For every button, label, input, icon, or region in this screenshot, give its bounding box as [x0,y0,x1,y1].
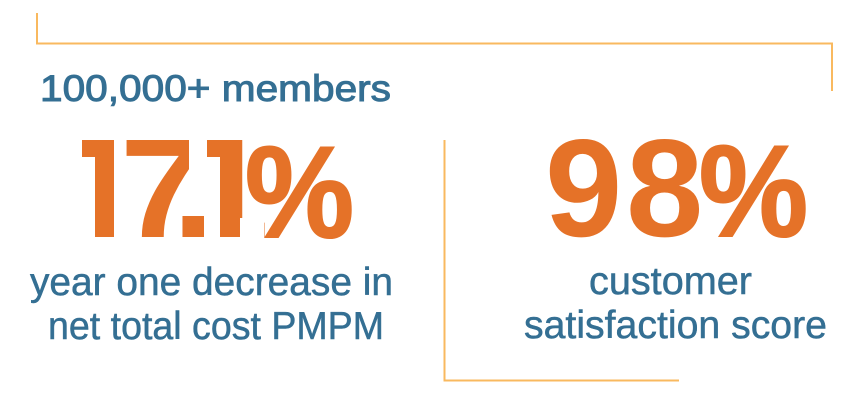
label line two: net total cost PMPM [48,305,384,348]
stat: 98%: % [699,118,808,264]
stat: 98%: 8 [626,111,703,266]
label line one: customer [589,260,752,303]
stat: 17.1% [60,109,354,267]
label line two: satisfaction score [524,304,827,347]
top bracket line [37,13,832,91]
stat: 17.1%: % [245,119,354,265]
stat label: cost decrease [30,261,393,348]
stat: 98%: 9 [545,111,622,266]
heading: members: 100,000+ members [40,68,391,109]
label line one: year one decrease in [30,261,393,304]
stat: 17.1%: 7 [120,109,205,267]
stat: 17.1%: . [171,109,218,267]
bottom bracket line [444,140,679,380]
stat label: satisfaction [524,260,827,347]
stat: 17.1%: 1 [190,109,268,267]
stat: 17.1%: 1 [64,109,142,267]
